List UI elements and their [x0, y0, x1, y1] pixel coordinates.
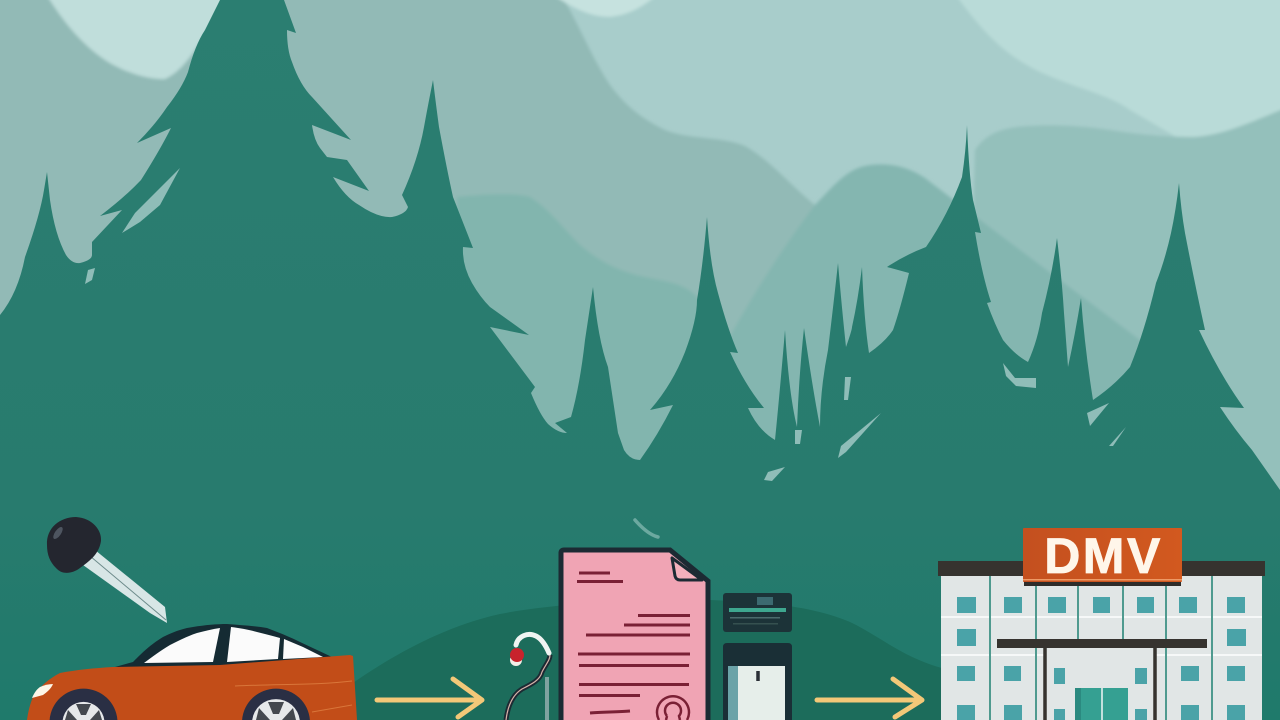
foreground hill	[350, 600, 950, 720]
entrance doors	[1075, 688, 1128, 720]
roof	[938, 561, 1265, 576]
DMV sign: DMV	[1044, 528, 1163, 584]
document seal	[657, 696, 689, 720]
DMV building	[938, 528, 1265, 720]
page fold	[672, 558, 702, 580]
windows	[957, 597, 1246, 720]
light gaps between branches	[85, 168, 1126, 481]
arrow: documents to DMV	[817, 679, 922, 717]
headlight	[32, 684, 53, 698]
icon: pink document	[561, 550, 708, 720]
icon: small ID card	[723, 593, 792, 632]
light streak	[635, 520, 658, 537]
document text lines	[577, 573, 690, 713]
entrance canopy	[997, 639, 1207, 648]
canopy columns	[1045, 648, 1155, 720]
front wheel	[50, 689, 117, 720]
icon: red car	[27, 624, 357, 720]
icon: car key	[47, 517, 167, 623]
arrow: car to documents	[377, 679, 482, 717]
icon: phone	[723, 643, 792, 720]
rear wheel	[242, 689, 310, 720]
icon: hook tool	[506, 634, 550, 720]
facade lines	[941, 617, 1262, 655]
